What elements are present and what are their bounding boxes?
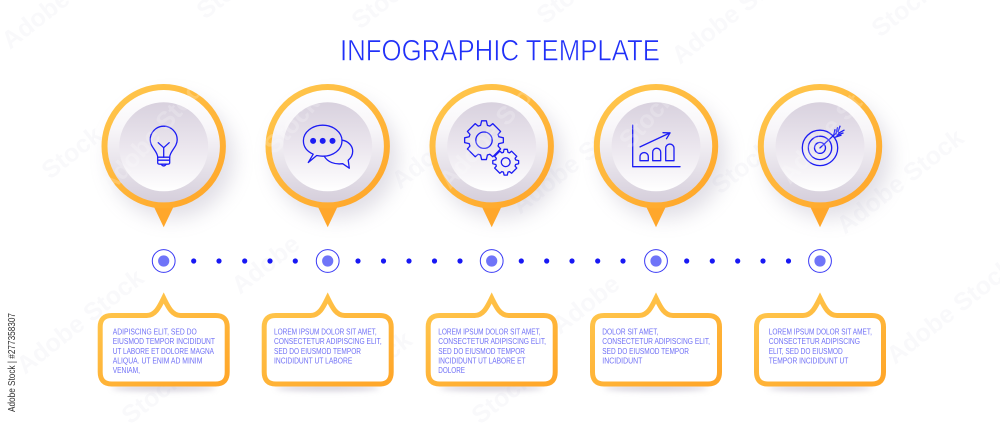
marker 3: gears <box>432 87 562 227</box>
text box 1 <box>100 298 227 391</box>
text box 3: LOREM IPSUM DOLOR SIT AMET, <box>438 328 541 337</box>
watermark over markers <box>94 57 897 199</box>
timeline node 5 <box>809 250 831 272</box>
watermark pattern: Stock <box>466 366 537 429</box>
marker 4: growth chart <box>597 87 726 227</box>
text box 3: INCIDIDUNT UT LABORE ET <box>438 356 526 365</box>
watermark over markers: Adobe Stock <box>94 67 217 199</box>
text box 1: EIUSMOD TEMPOR INCIDIDUNT <box>113 337 215 346</box>
icon: lightbulb <box>150 126 177 166</box>
timeline <box>152 250 831 272</box>
text box 1: ALIQUA. UT ENIM AD MINIM <box>113 356 203 365</box>
watermark over markers: Adobe Stock <box>434 62 557 194</box>
marker 5: target <box>761 87 890 227</box>
icon: chat bubbles <box>303 125 353 168</box>
text box 5: ELIT, SED DO EIUSMOD <box>769 347 843 356</box>
timeline node 2 <box>316 250 339 272</box>
timeline dots 2-3 <box>355 258 463 264</box>
watermark pattern: Stock <box>706 136 777 200</box>
watermark pattern: Stock <box>36 121 107 185</box>
watermark pattern: Stock <box>116 366 187 429</box>
watermark pattern: Adobe Stock <box>831 124 969 240</box>
icon: growth chart <box>633 125 680 167</box>
timeline node 1 <box>152 250 175 272</box>
text box 2: SED DO EIUSMOD TEMPOR <box>274 347 361 356</box>
timeline node 3 <box>480 250 503 272</box>
text box 4: SED DO EIUSMOD TEMPOR <box>602 347 689 356</box>
text box 4: CONSECTETUR ADIPISCING ELIT, <box>602 337 710 346</box>
marker 2: chat bubbles <box>268 87 398 227</box>
stock id side label: Adobe Stock | #277358307 <box>7 313 18 412</box>
text box 5: TEMPOR INCIDIDUNT UT <box>769 356 848 365</box>
text box 4: INCIDIDUNT <box>602 356 642 365</box>
text box 5 <box>756 298 884 391</box>
text box 3: DOLORE <box>438 366 465 375</box>
timeline node 4 <box>645 250 667 272</box>
text box 5: LOREM IPSUM DOLOR SIT AMET, <box>769 328 872 337</box>
watermark over markers: Stock <box>259 90 325 159</box>
watermark pattern: Stock <box>346 326 417 390</box>
watermark pattern: Adobe <box>546 270 625 340</box>
icon: gears <box>465 121 519 175</box>
watermark over markers: Stock <box>614 85 680 154</box>
watermark pattern: Adobe <box>386 125 465 195</box>
text box 3: CONSECTETUR ADIPISCING ELIT, <box>438 337 546 346</box>
text box 1: UT LABORE ET DOLORE MAGNA <box>113 347 215 356</box>
timeline dots 1-2 <box>191 258 298 264</box>
text box 1: VENIAM, <box>113 366 140 375</box>
text box 2 <box>264 298 391 391</box>
text box 1: ADIPISCING ELIT, SED DO <box>113 328 197 337</box>
timeline dots 3-4 <box>519 258 626 264</box>
watermark pattern: Adobe <box>226 230 305 300</box>
icon: target with arrow <box>802 126 844 166</box>
text box 3: SED DO EIUSMOD TEMPOR <box>438 347 525 356</box>
text box 2: INCIDIDUNT UT LABORE <box>274 356 352 365</box>
text box 3 <box>428 298 555 391</box>
title: INFOGRAPHIC TEMPLATE <box>340 35 660 68</box>
timeline dots 4-5 <box>684 258 791 264</box>
marker 1: lightbulb <box>104 87 234 227</box>
watermark pattern: Adobe Stock <box>11 264 149 380</box>
text box 5: CONSECTETUR ADIPISCING <box>769 337 860 346</box>
text box 4: DOLOR SIT AMET, <box>602 328 658 337</box>
text box 4 <box>592 298 720 391</box>
watermark pattern: Adobe Stock <box>506 104 644 220</box>
text box 2: CONSECTETUR ADIPISCING ELIT, <box>274 337 382 346</box>
watermark over markers: Adobe Stock <box>774 57 897 189</box>
text box 2: LOREM IPSUM DOLOR SIT AMET, <box>274 328 377 337</box>
